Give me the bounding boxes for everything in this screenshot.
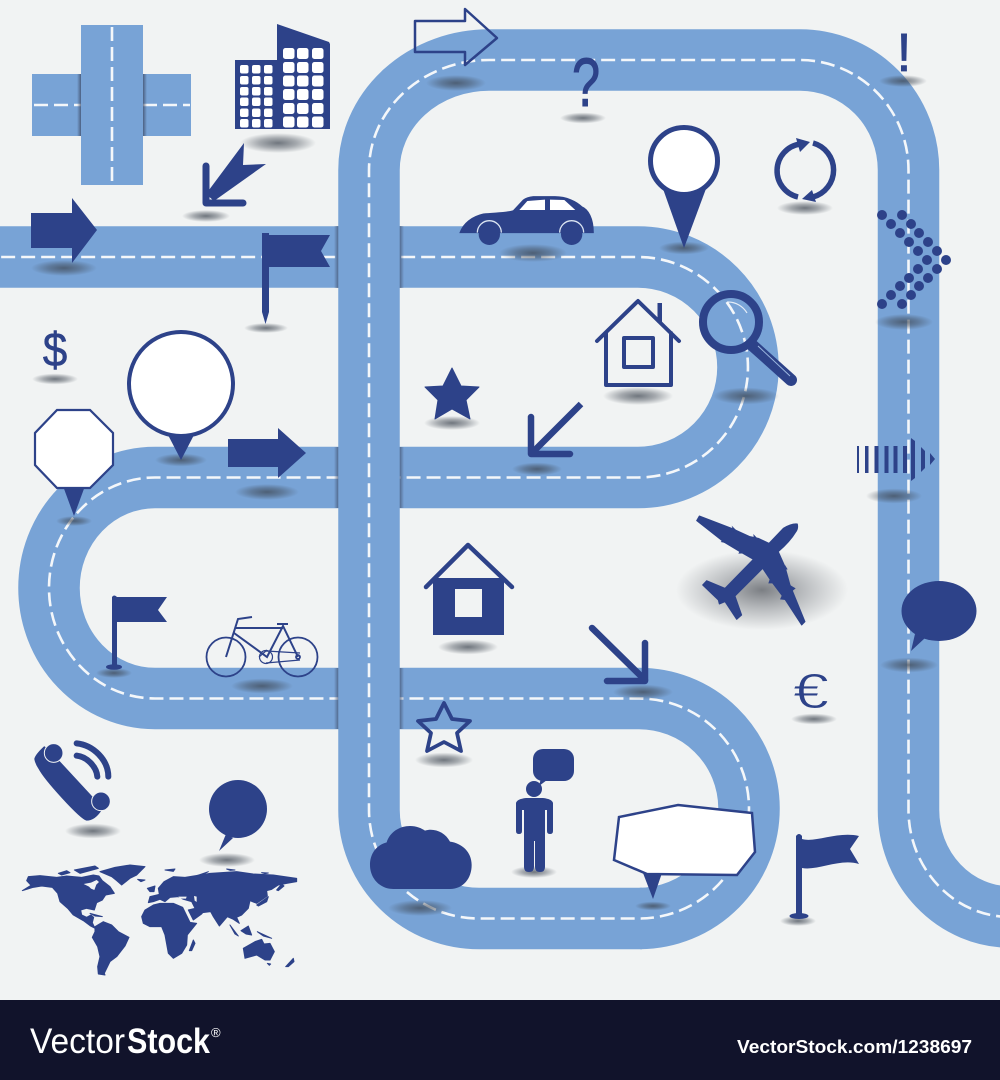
- icon: buildings: [235, 24, 330, 153]
- icon: airplane: [697, 516, 805, 625]
- icon: striped arrow: [857, 438, 935, 504]
- icon: dollar sign: $: [43, 322, 67, 376]
- footer logo text: ®: [211, 1025, 221, 1040]
- icon: outline arrow: [415, 9, 497, 91]
- icon: location pin on road: [650, 128, 718, 254]
- icon: solid house: [426, 545, 512, 654]
- icon: question mark: ?: [572, 44, 600, 121]
- icon: thin down-left arrow: [512, 404, 581, 476]
- icon: down-right arrow: [592, 628, 673, 700]
- icon: question mark: [560, 44, 606, 124]
- road: main loop with vertical section: [369, 60, 1000, 918]
- icon: white angular speech bubble: [614, 805, 755, 910]
- map: Europe, Africa, Asia and Australia: [142, 869, 297, 967]
- footer bar: [0, 1000, 1000, 1080]
- icon: exclamation mark: [879, 23, 927, 87]
- world map: [22, 865, 297, 975]
- icon: euro sign: €: [793, 664, 829, 719]
- footer logo text: [30, 1022, 221, 1061]
- icon: bicycle: [206, 617, 318, 694]
- footer url text: VectorStock.com/1238697: [737, 1036, 972, 1057]
- icon: dotted chevron arrow: [875, 210, 951, 330]
- road: serpentine section passing under the vertical road: [0, 257, 749, 918]
- icon: refresh arrows: [777, 138, 834, 215]
- icon: solid arrow on middle road: [228, 428, 306, 500]
- icon: telephone handset: [35, 743, 110, 820]
- icon: magnifying glass: [703, 294, 791, 380]
- icon: cloud: [370, 826, 472, 916]
- icon: solid arrow on top road: [31, 198, 97, 276]
- shadow under magnifier: [713, 388, 779, 404]
- icon: round speech bubble: [199, 780, 267, 867]
- shadow under airplane: [676, 550, 848, 630]
- road crossing shadows: [334, 226, 404, 729]
- icon: outlined star: [415, 703, 473, 768]
- icon: small flag: [96, 596, 167, 678]
- shadow under telephone: [65, 824, 121, 838]
- icon: large round pin: [129, 332, 233, 466]
- icon: octagon pin: [35, 410, 113, 526]
- icon: barbed down-left arrow: [182, 143, 266, 222]
- icon: outlined house: [597, 301, 679, 405]
- icon: flag with spike: [244, 233, 330, 333]
- footer logo text: Stock: [127, 1022, 210, 1061]
- icon: person with speech bubble: [511, 749, 574, 878]
- footer logo text: Vector: [30, 1022, 125, 1061]
- icon: solid star: [424, 368, 480, 430]
- icon: waving flag: [780, 834, 859, 926]
- icon: road crossing: [32, 25, 191, 185]
- icon: car: [460, 197, 593, 262]
- icon: dollar sign: [32, 322, 78, 384]
- map: Americas and Greenland: [22, 865, 145, 975]
- icon: exclamation mark: !: [896, 23, 912, 83]
- icon: speech bubble on right road: [880, 581, 976, 672]
